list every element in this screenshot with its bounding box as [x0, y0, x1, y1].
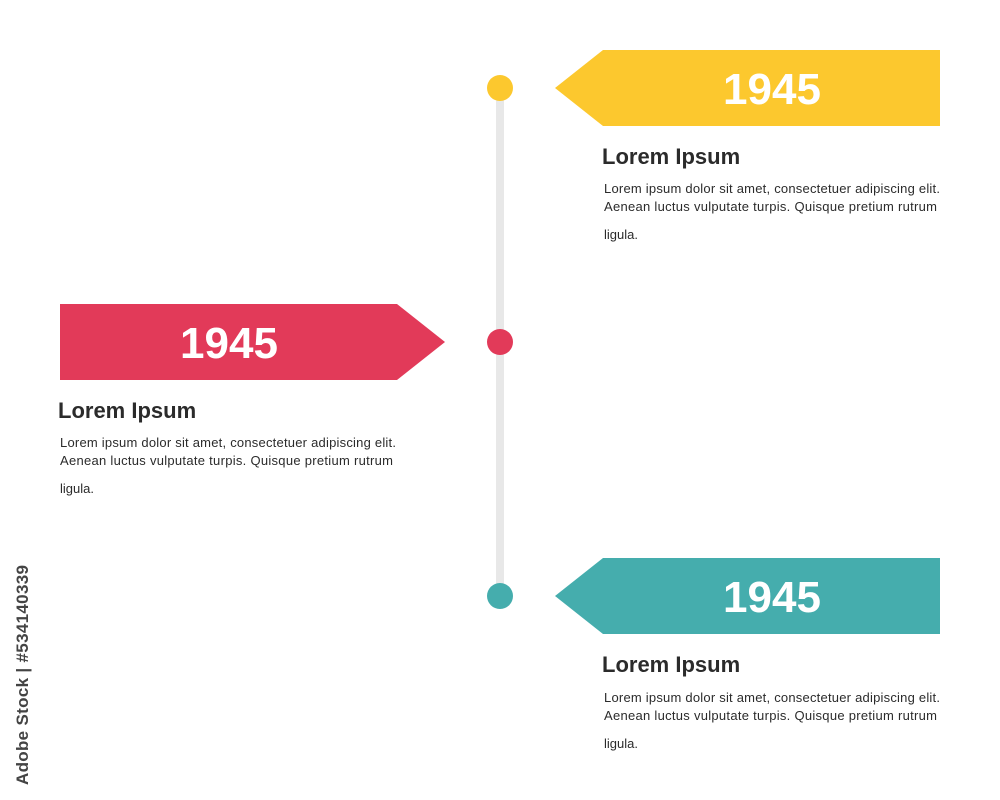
- text block: bottom right: Aenean luctus vulputate turpis. Quisque pretium rutrum: [604, 708, 937, 723]
- banner: yellow 1945: 1945: [723, 65, 821, 114]
- text block: bottom right: [602, 652, 940, 751]
- text block: left: Lorem Ipsum: [58, 398, 196, 423]
- text block: top right: Lorem ipsum dolor sit amet, consectetuer adipiscing elit.: [604, 181, 940, 196]
- text block: left: Lorem ipsum dolor sit amet, consectetuer adipiscing elit.: [60, 435, 396, 450]
- timeline axis: [496, 88, 504, 596]
- banner: teal 1945: [555, 558, 940, 634]
- banner: yellow 1945: [555, 50, 940, 126]
- banner: red 1945: 1945: [180, 319, 278, 368]
- text block: bottom right: ligula.: [604, 736, 638, 751]
- text block: left: [58, 398, 396, 496]
- dot: teal: [487, 583, 513, 609]
- text block: left: ligula.: [60, 481, 94, 496]
- banner: teal 1945: 1945: [723, 573, 821, 622]
- text block: top right: Lorem Ipsum: [602, 144, 740, 169]
- text block: top right: Aenean luctus vulputate turpis. Quisque pretium rutrum: [604, 199, 937, 214]
- dot: yellow: [487, 75, 513, 101]
- dot: red: [487, 329, 513, 355]
- text block: bottom right: Lorem Ipsum: [602, 652, 740, 677]
- text block: bottom right: Lorem ipsum dolor sit amet, consectetuer adipiscing elit.: [604, 690, 940, 705]
- text block: top right: [602, 144, 940, 242]
- watermark: stock id: Adobe Stock | #534140339: [13, 565, 32, 785]
- banner: red 1945: [60, 304, 445, 380]
- text block: left: Aenean luctus vulputate turpis. Quisque pretium rutrum: [60, 453, 393, 468]
- text block: top right: ligula.: [604, 227, 638, 242]
